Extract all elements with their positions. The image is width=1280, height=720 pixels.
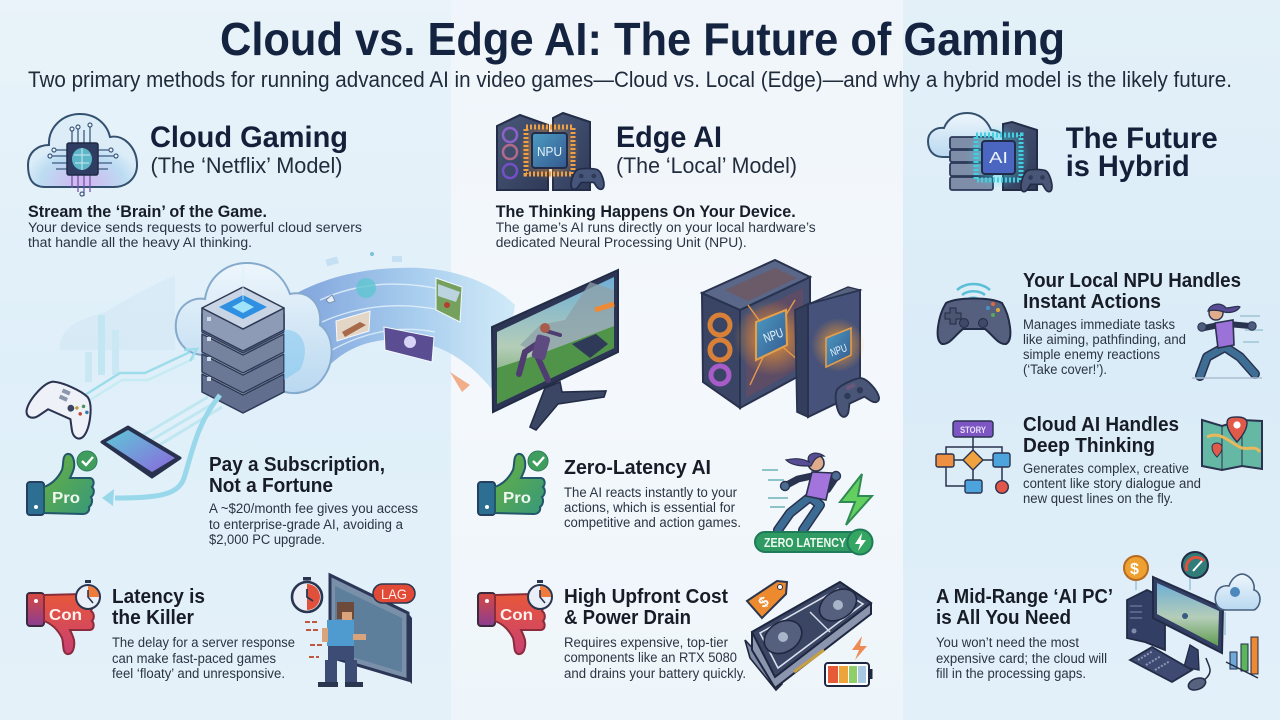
icon: battery [825,663,872,686]
mini bar chart [1226,637,1258,678]
text: zero latency pro [564,456,741,531]
icon: small cloud [1215,574,1260,610]
label: lag: LAG [381,586,407,602]
panel: cloud gaming [0,100,515,720]
background bar shapes [60,275,175,382]
text: latency con: Latency is [112,585,205,608]
heading: edge ai [616,121,797,178]
icon: story flowchart [936,421,1010,493]
text: cost con: components like an RTX 5080 [564,650,737,666]
text: cloud ai [1023,413,1201,507]
text: mid-range pc: is All You Need [936,606,1071,629]
text: latency con: the Killer [112,606,194,629]
text: zero latency pro: competitive and action games. [564,515,741,531]
badge: con [27,580,100,654]
illustration: monitor [492,270,618,430]
label: zero latency: ZERO LATENCY [764,535,846,550]
icon: server in cloud [176,263,332,413]
text: local npu: Manages immediate tasks [1023,317,1175,333]
thumbnail: desert [336,311,370,341]
text: cloud ai: new quest lines on the fly. [1023,491,1173,507]
heading: edge ai: (The ‘Local’ Model) [616,153,797,178]
text: mid-range pc [936,585,1113,682]
text: cost con: and drains your battery quickly. [564,666,746,682]
illustration: lag screen [292,575,415,687]
arrow: response to device [102,395,220,506]
console with chip: NPU [829,342,849,359]
text: subscription pro: Pay a Subscription, [209,453,385,476]
heading: future is hybrid [1066,122,1218,183]
icon: hybrid chip: AI [989,150,1008,167]
text: subscription pro [209,453,418,548]
heading: cloud gaming: (The ‘Netflix’ Model) [150,153,342,178]
arrow: requests to server [85,349,222,447]
badge: con: Con [49,607,82,624]
badge: pro [478,451,548,515]
text: cloud ai: Cloud AI Handles [1023,413,1179,436]
icon: phone [102,427,180,477]
icon: npu hardware [497,113,604,190]
console with chip [795,287,865,417]
text: mid-range pc: expensive card; the cloud will [936,651,1107,667]
text: local npu: (‘Take cover!’). [1023,362,1107,378]
text: local npu: like aiming, pathfinding, and [1023,332,1186,348]
text: cloud summary: Stream the ‘Brain’ of the Game. [28,203,267,221]
text: local npu: simple enemy reactions [1023,347,1160,363]
illustration: npu tower: NPU [761,325,785,346]
illustration: zero latency runner [755,453,872,554]
icon: quest map [1202,417,1262,470]
text: edge summary [496,203,816,251]
text: subscription pro: Not a Fortune [209,474,333,497]
heading: future is hybrid: The Future [1066,122,1218,155]
badge: pro: Pro [52,490,80,507]
icon: white game controller [24,374,100,441]
icon: power bolt [852,636,867,660]
icon: hybrid chip [928,113,1052,192]
text: subscription pro: A ~$20/month fee gives you access [209,501,418,517]
badge: pro: Pro [503,490,531,507]
text: latency con: can make fast-paced games [112,651,276,667]
heading: edge ai: Edge AI [616,121,722,154]
text: local npu: Your Local NPU Handles [1023,269,1241,292]
text: latency con [112,585,295,682]
text: local npu: Instant Actions [1023,290,1161,313]
text: edge summary: dedicated Neural Processing Unit (NPU). [496,235,747,251]
text: mid-range pc: You won’t need the most [936,635,1079,651]
text: cloud ai: content like story dialogue and [1023,476,1201,492]
text: cloud summary: that handle all the heavy AI thinking. [28,235,252,251]
icon: cloud brain chip [28,114,137,196]
text: edge summary: The Thinking Happens On Your Device. [496,203,796,221]
icon: dollar coin: $ [1130,561,1139,578]
text: cost con: High Upfront Cost [564,585,728,608]
text: mid-range pc: A Mid-Range ‘AI PC’ [936,585,1113,608]
panel: edge ai [451,100,903,720]
text: cost con [564,585,746,682]
illustration: ai pc [1124,552,1260,692]
text: local npu [1023,269,1241,378]
data stream band [285,252,515,400]
text: latency con: feel ‘floaty’ and unresponsive. [112,666,285,682]
icon: stopwatch [292,577,322,612]
text: cost con: Requires expensive, top-tier [564,635,728,651]
icon: gauge [1182,552,1208,578]
panel: hybrid future [903,100,1280,720]
title: Cloud vs. Edge AI: The Future of Gaming [220,13,1065,65]
icon: price tag [747,581,787,618]
heading: cloud gaming: Cloud Gaming [150,121,348,154]
text: cloud summary: Your device sends requests to powerful cloud servers [28,220,362,236]
text: subscription pro: to enterprise-grade AI, avoiding a [209,517,403,533]
heading: future is hybrid: is Hybrid [1066,150,1190,183]
icon: price tag: $ [755,593,773,612]
text: cloud ai: Deep Thinking [1023,434,1155,457]
text: subscription pro: $2,000 PC upgrade. [209,532,325,548]
icon: npu hardware: NPU [537,144,562,159]
text: zero latency pro: Zero-Latency AI [564,456,711,479]
text: zero latency pro: The AI reacts instantly to your [564,485,737,501]
thumbnail: speed [384,327,434,362]
badge: pro [27,451,97,515]
illustration: npu tower [702,260,881,418]
text: edge summary: The game’s AI runs directly on your local hardware’s [496,220,816,236]
illustration: graphics card [745,582,871,690]
icon: lightning [840,474,872,525]
controller [829,373,881,418]
subtitle: Two primary methods for running advanced AI in video games—Cloud vs. Local (Edge)—and why a hybrid model is the likely future. [28,67,1232,92]
heading: cloud gaming [150,121,348,178]
text: cloud summary [28,203,362,251]
text: zero latency pro: actions, which is essential for [564,500,735,516]
text: cost con: & Power Drain [564,606,691,629]
illustration: punching character [1192,304,1263,378]
thumbnail: landscape [436,278,462,322]
icon: gamepad wifi [938,284,1010,344]
badge: con [478,580,552,654]
badge: con: Con [500,607,533,624]
icon: dollar coin [1124,556,1148,580]
icon: story flowchart: STORY [960,425,987,436]
text: latency con: The delay for a server response [112,635,295,651]
text: mid-range pc: fill in the processing gaps. [936,666,1086,682]
pixel character [305,602,366,687]
text: cloud ai: Generates complex, creative [1023,461,1189,477]
